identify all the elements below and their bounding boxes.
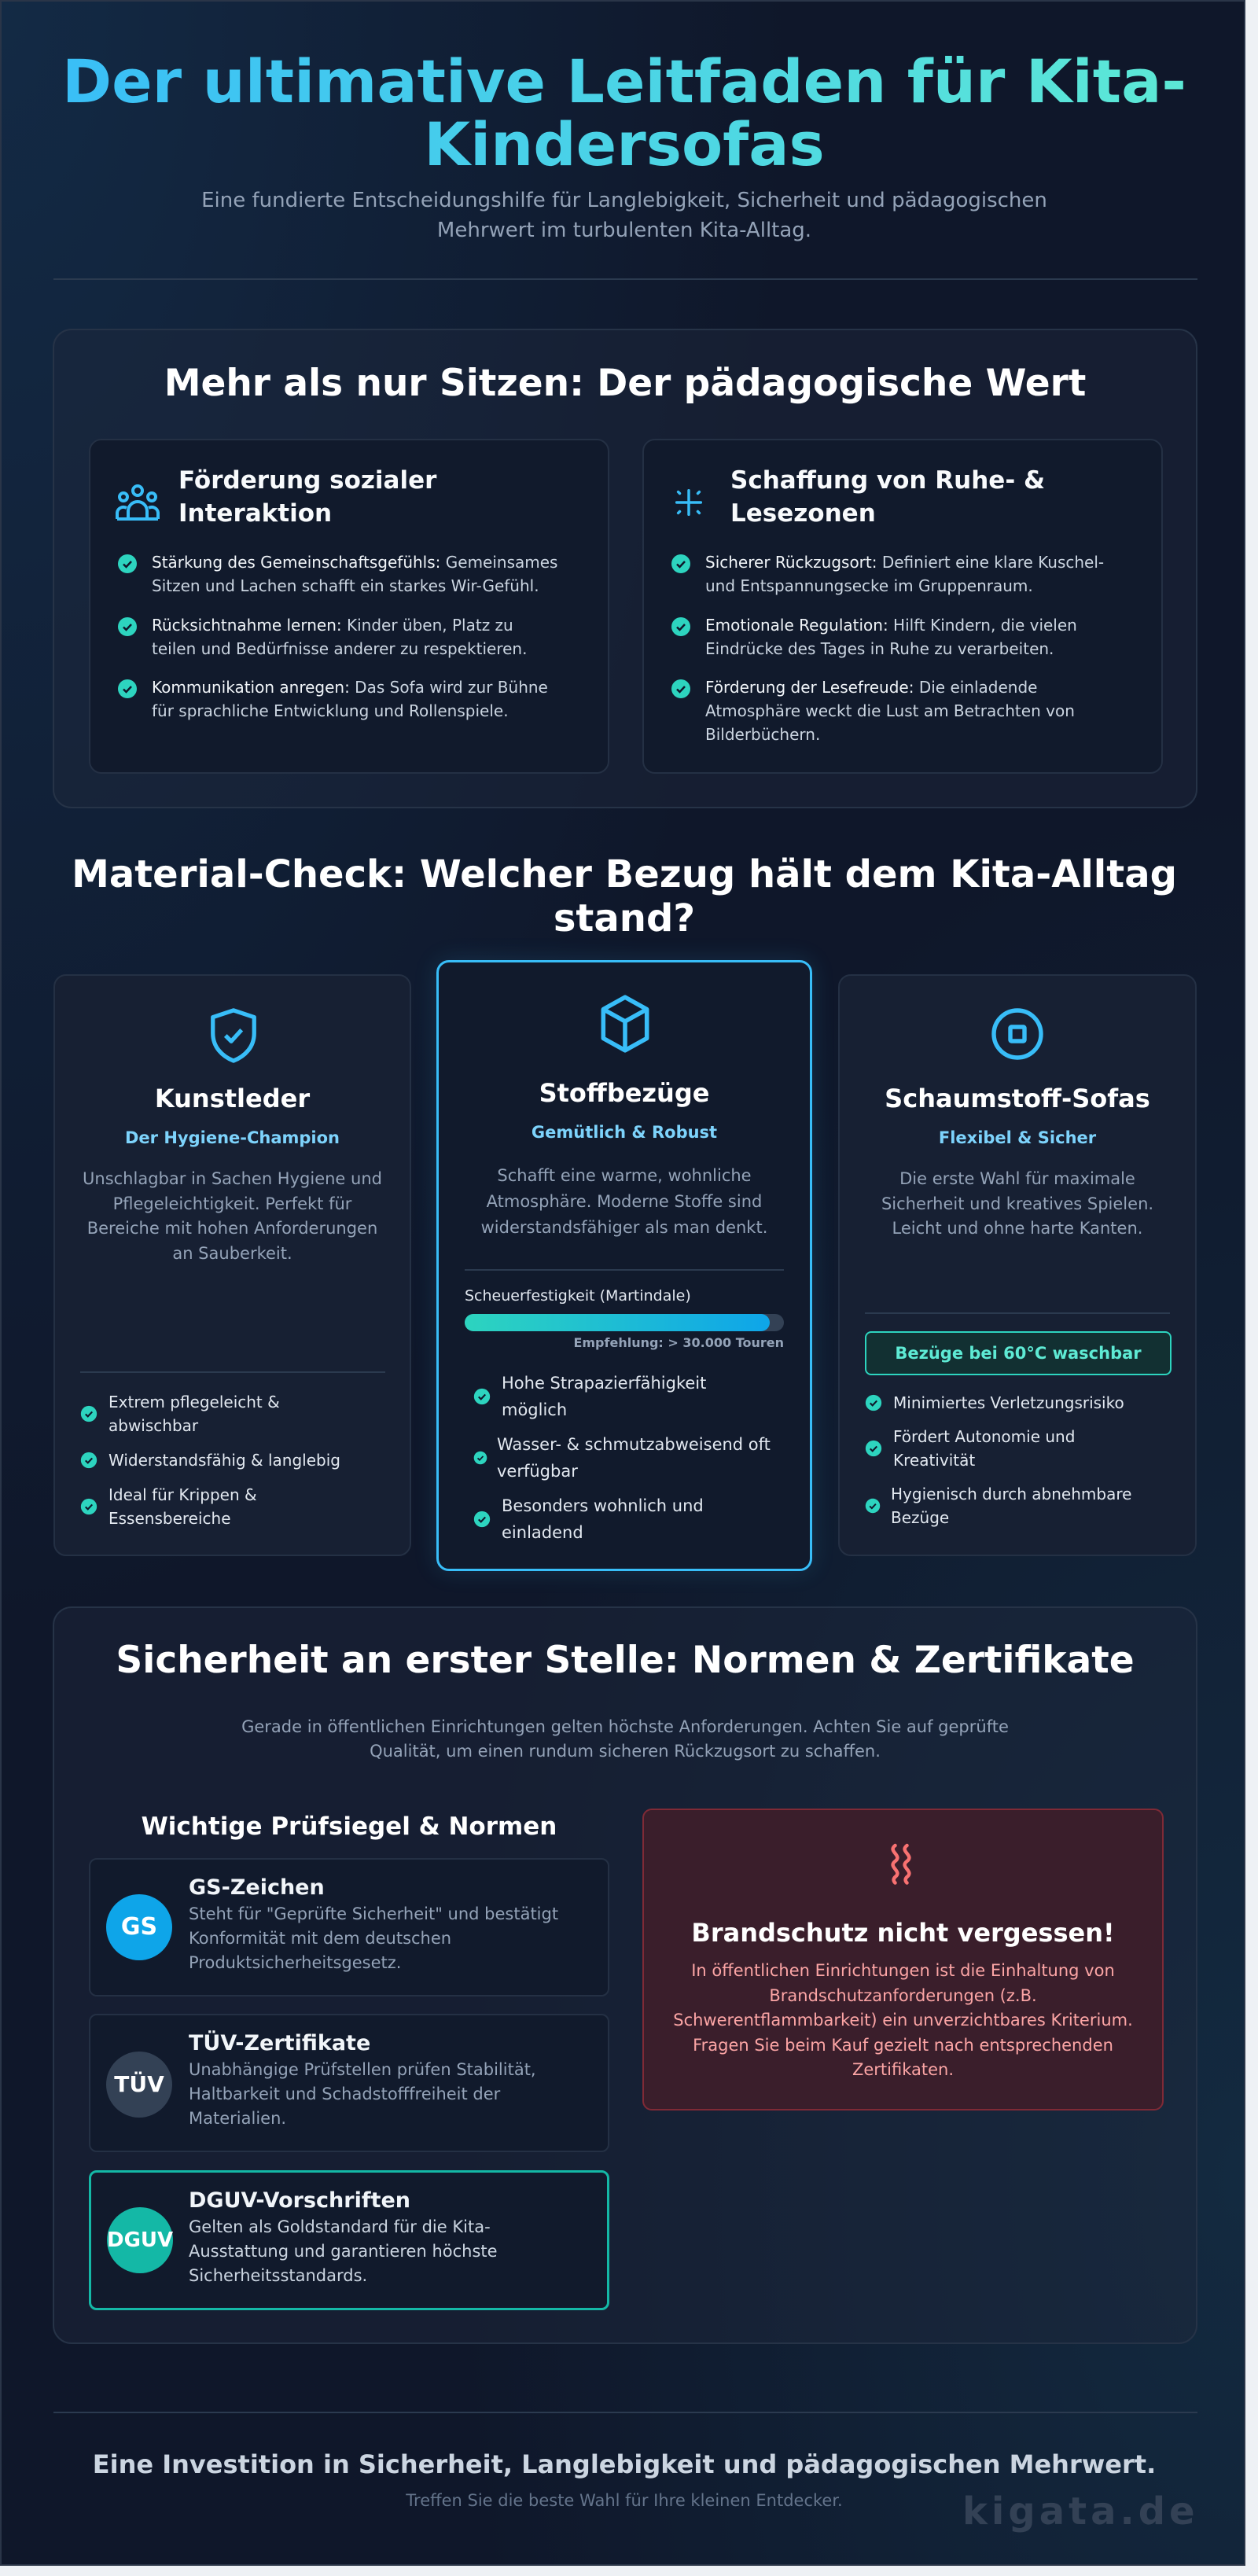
title bbox=[17, 50, 1231, 176]
title: Kindersofas bbox=[424, 109, 825, 179]
callout: Brandschutz bbox=[642, 1809, 1164, 2110]
card: TÜV bbox=[89, 2014, 609, 2152]
title: Schaumstoff-Sofas bbox=[885, 1084, 1150, 1113]
card: Kunstleder bbox=[53, 974, 411, 1556]
bullets: teilen und Bedürfnisse anderer zu respektieren. bbox=[152, 639, 527, 658]
card: soziale Interaktion bbox=[89, 439, 609, 774]
subtitle: Eine fundierte Entscheidungshilfe für Langlebigkeit, Sicherheit und pädagogischen Mehrwert im turbulenten Kita-Alltag. bbox=[201, 189, 1047, 242]
icon: TÜV badge: TÜV bbox=[114, 2071, 164, 2097]
heading: Sicherheit: Sicherheit an erster Stelle: Normen & Zertifikate bbox=[116, 1639, 1135, 1682]
bar chart: Scheuerfestigkeit bbox=[465, 1287, 784, 1350]
title: Stoffbezüge bbox=[539, 1078, 709, 1108]
icon: cube bbox=[601, 995, 649, 1053]
features bbox=[865, 1393, 1131, 1527]
bullets: Stärkung des Gemeinschaftsgefühls: Gemeinsames Sitzen und Lachen schafft ein starkes Wir-Gefühl. bbox=[152, 553, 557, 595]
card: TÜV: TÜV-Zertifikate bbox=[189, 2031, 370, 2055]
features: Hygienisch durch abnehmbare Bezüge bbox=[891, 1485, 1131, 1527]
icon: DGUV badge: DGUV bbox=[107, 2228, 173, 2252]
subtitle: Gemütlich & Robust bbox=[532, 1123, 717, 1142]
features: Wasser- & schmutzabweisend oft verfügbar bbox=[497, 1435, 771, 1481]
features: Besonders wohnlich und einladend bbox=[502, 1496, 704, 1542]
icon: GS badge: GS bbox=[121, 1913, 157, 1941]
bullets: Sicherer Rückzugsort: Definiert eine klare Kuschel- und Entspannungsecke im Gruppenraum. bbox=[705, 553, 1104, 595]
bar chart: Scheuerfestigkeit: Empfehlung: > 30.000 Touren bbox=[573, 1335, 784, 1350]
card: DGUV bbox=[89, 2170, 609, 2310]
card heading: Förderung sozialer Interaktion bbox=[178, 466, 436, 528]
card: Stoffbezüge (highlighted) bbox=[436, 960, 812, 1571]
card: DGUV: DGUV-Vorschriften bbox=[189, 2188, 410, 2213]
bullets bbox=[671, 553, 1104, 744]
title: Kunstleder bbox=[155, 1084, 310, 1113]
card heading: Schaffung von Ruhe- & Lesezonen bbox=[730, 466, 1045, 528]
features: Hohe Strapazierfähigkeit möglich bbox=[502, 1374, 706, 1419]
features bbox=[80, 1393, 340, 1528]
card: TÜV: Unabhängige Prüfstellen prüfen Stabilität, Haltbarkeit und Schadstofffreiheit der Materialien. bbox=[189, 2060, 536, 2128]
card: GS bbox=[89, 1858, 609, 1996]
icon: shield bbox=[211, 1008, 256, 1063]
icon: GS badge bbox=[106, 1894, 172, 1960]
icon: fire/heat bbox=[891, 1843, 911, 1885]
subtitle: Der Hygiene-Champion bbox=[125, 1128, 340, 1147]
panel: pädagogischer Wert bbox=[53, 329, 1197, 808]
card: Ruhezonen bbox=[642, 439, 1163, 774]
card: DGUV: Gelten als Goldstandard für die Kita-Ausstattung und garantieren höchste Sicherheitsstandards. bbox=[189, 2217, 498, 2285]
card: GS: Steht für "Geprüfte Sicherheit" und bestätigt Konformität mit dem deutschen Produktsicherheitsgesetz. bbox=[189, 1904, 558, 1972]
description: Schafft eine warme, wohnliche Atmosphäre. Moderne Stoffe sind widerstandsfähiger als man denkt. bbox=[481, 1166, 767, 1237]
icon: TÜV badge bbox=[106, 2052, 172, 2118]
features: Widerstandsfähig & langlebig bbox=[109, 1451, 340, 1470]
features: Fördert Autonomie und Kreativität bbox=[893, 1427, 1075, 1470]
features: Ideal für Krippen & Essensbereiche bbox=[109, 1485, 257, 1528]
features: Extrem pflegeleicht & abwischbar bbox=[109, 1393, 280, 1435]
title: Der ultimative Leitfaden für Kita- bbox=[62, 46, 1186, 116]
icon: circle square bbox=[991, 1008, 1043, 1060]
features bbox=[473, 1374, 771, 1542]
bullets: Förderung der Lesefreude: Die einladende Atmosphäre weckt die Lust am Betrachten von Bilderbüchern. bbox=[705, 678, 1075, 744]
bullets: Rücksichtnahme lernen: Kinder üben, Platz zu bbox=[152, 616, 513, 635]
bullets: Emotionale Regulation: Hilft Kindern, die vielen Eindrücke des Tages in Ruhe zu verarbeiten. bbox=[705, 616, 1077, 658]
subheading: Prüfsiegel: Wichtige Prüfsiegel & Normen bbox=[142, 1812, 557, 1841]
icon: sparkle bbox=[675, 489, 702, 516]
footer tagline: Eine Investition in Sicherheit, Langlebigkeit und pädagogischen Mehrwert. bbox=[93, 2449, 1156, 2479]
footer subline: Treffen Sie die beste Wahl für Ihre kleinen Entdecker. bbox=[406, 2491, 843, 2510]
badge: waschbar: Bezüge bei 60°C waschbar bbox=[895, 1344, 1142, 1363]
panel: Sicherheit bbox=[53, 1606, 1197, 2344]
icon: DGUV badge bbox=[107, 2207, 173, 2273]
heading: Material-Check: Material-Check: Welcher Bezug hält dem Kita-Alltag stand? bbox=[72, 852, 1177, 940]
bullets bbox=[118, 553, 557, 720]
subtitle: Flexibel & Sicher bbox=[939, 1128, 1096, 1147]
badge: waschbar bbox=[865, 1331, 1172, 1375]
callout title: Brandschutz nicht vergessen! bbox=[691, 1918, 1115, 1948]
callout text: In öffentlichen Einrichtungen ist die Einhaltung von Brandschutzanforderungen (z.B. Schwerentflammbarkeit) ein unverzichtbares Kriterium. Fragen Sie beim Kauf gezielt nach entsprechenden Zertifikaten. bbox=[673, 1961, 1133, 2079]
brand: kigata.de: kigata.de bbox=[962, 2490, 1199, 2534]
description: Unschlagbar in Sachen Hygiene und Pflegeleichtigkeit. Perfekt für Bereiche mit hohen Anforderungen an Sauberkeit. bbox=[83, 1169, 382, 1263]
bar chart: Scheuerfestigkeit: Scheuerfestigkeit (Martindale) bbox=[465, 1287, 691, 1305]
features: Minimiertes Verletzungsrisiko bbox=[893, 1393, 1124, 1412]
intro text: Gerade in öffentlichen Einrichtungen gelten höchste Anforderungen. Achten Sie auf geprüfte Qualität, um einen rundum sicheren Rückzugsort zu schaffen. bbox=[241, 1717, 1009, 1761]
card: Schaumstoff-Sofas bbox=[838, 974, 1197, 1556]
bullets: Kommunikation anregen: Das Sofa wird zur Bühne für sprachliche Entwicklung und Rollenspiele. bbox=[152, 678, 548, 720]
icon: people bbox=[116, 484, 160, 521]
heading: pädagogischer Wert: Mehr als nur Sitzen: Der pädagogische Wert bbox=[164, 362, 1086, 405]
card: GS: GS-Zeichen bbox=[189, 1875, 325, 1900]
description: Die erste Wahl für maximale Sicherheit und kreatives Spielen. Leicht und ohne harte Kanten. bbox=[881, 1169, 1153, 1238]
